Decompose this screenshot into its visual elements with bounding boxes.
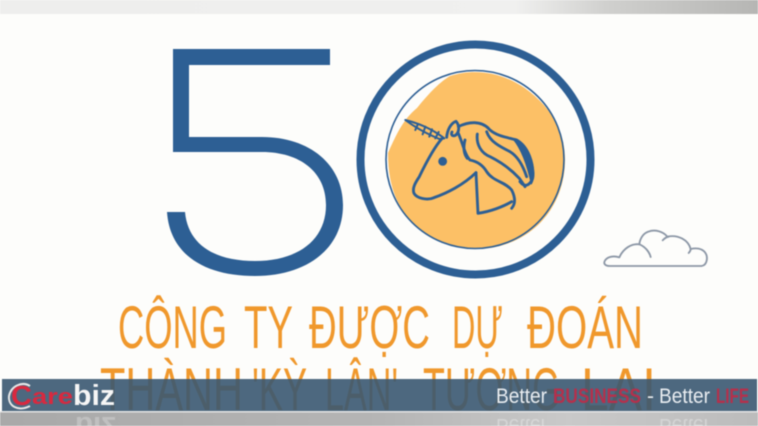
brand bar [2, 379, 757, 412]
title [100, 294, 656, 423]
title line 1: DỰ [452, 294, 503, 361]
logo word biz: biz [73, 380, 115, 412]
title line 2 [100, 356, 656, 423]
icon: cloud [604, 231, 707, 266]
title line 2: LÂN' [325, 356, 398, 423]
inner ring [386, 70, 564, 248]
bottom reflection strip [0, 411, 758, 426]
orange blob [388, 72, 565, 248]
outer ring [360, 44, 590, 274]
slogan: BUSINESS [553, 385, 641, 408]
title line 2: LAI [581, 356, 656, 423]
logo ring [9, 384, 30, 408]
title line 2: TƯƠNG [423, 356, 560, 423]
title line 2: 'KỲ [252, 356, 307, 423]
icon: unicorn head [405, 120, 534, 213]
title line 1 [118, 294, 643, 361]
title line 1: ĐƯỢC [309, 294, 430, 361]
numeral five [167, 49, 343, 276]
cafebiz logo [9, 380, 115, 412]
numeral zero: unicorn badge [360, 44, 590, 274]
slogan: Better [496, 385, 547, 408]
top browser strip [0, 0, 758, 14]
title line 1: TY [244, 294, 293, 361]
slogan [496, 385, 749, 408]
logo letters are: are [32, 384, 73, 409]
title line 2: THÀNH [100, 356, 243, 423]
logo letter c: C [11, 380, 32, 411]
title line 1: ĐOÁN [527, 294, 643, 361]
slogan: - [647, 385, 654, 408]
slogan: Better [659, 385, 710, 408]
title line 1: CÔNG [118, 294, 227, 361]
reflected slogan [496, 414, 710, 426]
